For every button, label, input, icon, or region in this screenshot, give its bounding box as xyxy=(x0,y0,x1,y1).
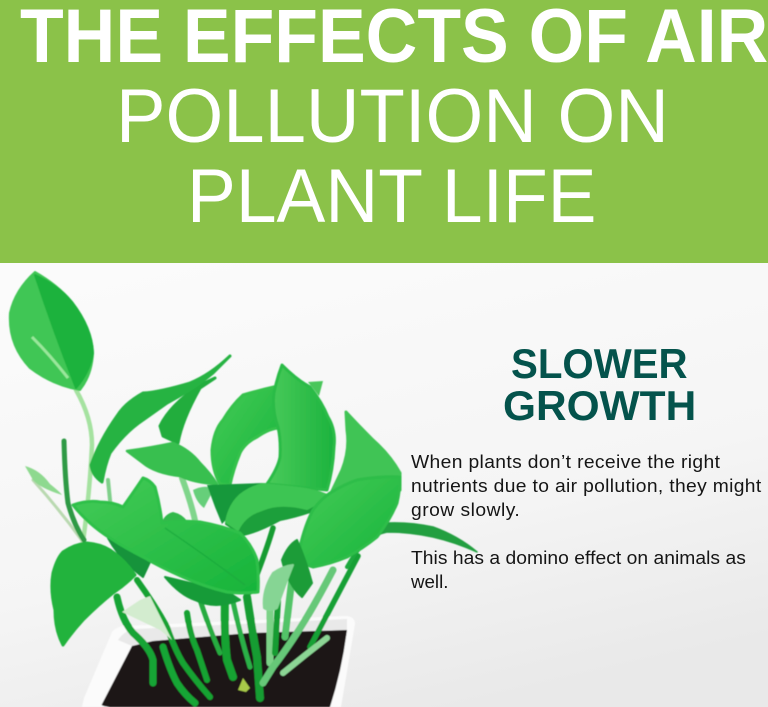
icon: large front leaf xyxy=(73,478,258,593)
icon: small dark leaf xyxy=(282,540,312,597)
icon: tall leaf xyxy=(308,381,323,396)
icon: small back leaf xyxy=(162,512,187,522)
icon: plant stems xyxy=(33,390,367,703)
body text: grow slowly. xyxy=(411,500,520,520)
heading: slower growth xyxy=(502,340,696,428)
heading: slower growth: GROWTH xyxy=(502,382,696,428)
icon: pale stem wedge xyxy=(122,596,172,640)
icon: lower center leaf xyxy=(193,487,214,508)
icon: dark lower leaf xyxy=(207,483,263,524)
icon: curled pale leaf xyxy=(264,565,293,610)
icon: upper left leaf xyxy=(10,272,93,390)
icon: curved back leaf xyxy=(160,378,215,443)
body text: nutrients due to air pollution, they might xyxy=(411,476,762,496)
icon: right long leaf xyxy=(367,523,477,552)
photo of potted plant xyxy=(8,270,768,707)
icon: right lower leaf xyxy=(300,477,400,567)
icon: plant and pot xyxy=(10,272,477,707)
body text: well. xyxy=(411,572,448,592)
body text xyxy=(411,452,762,592)
icon: pot xyxy=(82,616,355,707)
title line 2: POLLUTION ON xyxy=(116,74,669,159)
icon: right upper leaf xyxy=(330,412,400,495)
heading: slower growth: SLOWER xyxy=(511,340,688,386)
body text: When plants don’t receive the right xyxy=(411,452,720,472)
icon: large curved leaf xyxy=(212,386,280,485)
icon: bottom left leaf xyxy=(52,543,135,645)
title line 3: PLANT LIFE xyxy=(187,154,596,239)
icon: pointed mid leaf xyxy=(127,443,217,484)
icon: dark under leaf xyxy=(108,538,150,577)
icon: small leaf bud xyxy=(25,466,62,495)
body text: This has a domino effect on animals as xyxy=(411,548,746,568)
icon: curved long leaf xyxy=(91,356,230,482)
title banner xyxy=(0,0,768,263)
